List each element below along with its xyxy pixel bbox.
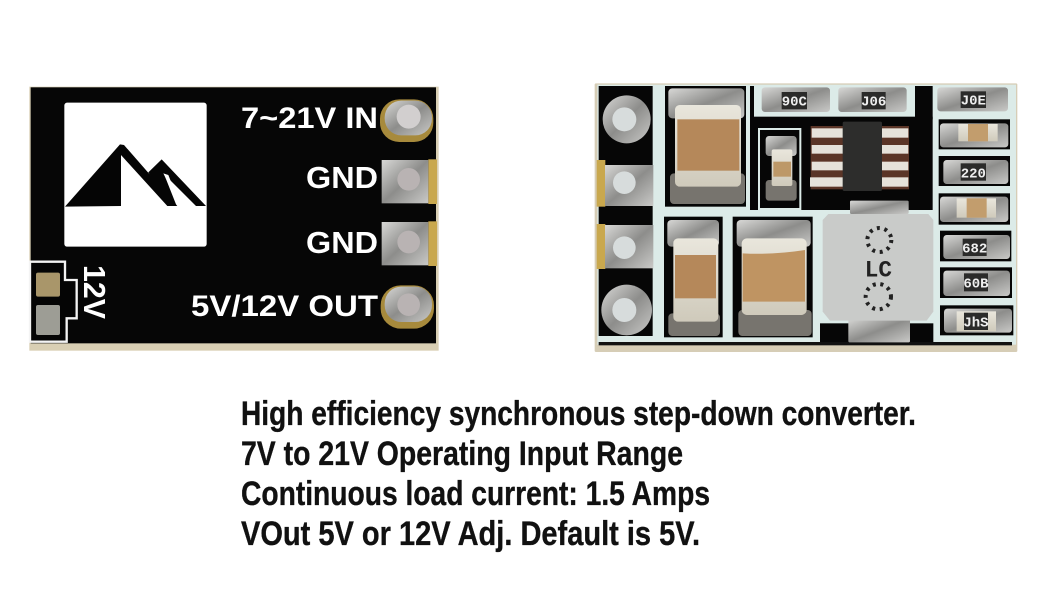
regulator IC with legs	[810, 122, 909, 191]
text block: specifications	[241, 395, 916, 553]
panel: board component side	[595, 83, 1017, 352]
resistor: 90C	[762, 87, 830, 112]
spec line 3: Continuous load current: 1.5 Amps	[241, 475, 710, 513]
resistor: JhS: JhS	[963, 316, 989, 332]
board edge	[29, 87, 439, 351]
label: GND: GND	[306, 160, 378, 195]
spec line 4: VOut 5V or 12V Adj. Default is 5V.	[241, 515, 700, 553]
capacitor: right column top	[940, 123, 1008, 147]
pad: GND 2	[382, 221, 437, 266]
resistor: 682: 682	[962, 242, 987, 258]
inductor	[823, 201, 933, 342]
resistor: 90C: 90C	[782, 94, 807, 110]
resistor: J0E	[937, 87, 1008, 111]
central black area	[750, 117, 933, 210]
label: 7~21V IN: 7~21V IN	[241, 102, 378, 135]
capacitor: right column middle	[940, 197, 1008, 222]
resistor: 220	[943, 160, 1008, 184]
spec line 1: High efficiency synchronous step-down converter.	[241, 395, 916, 433]
jumper: 12V solder bridge	[30, 262, 77, 342]
black solder mask	[31, 87, 436, 343]
pad: input	[380, 99, 433, 142]
resistor: J06: J06	[861, 94, 886, 110]
pad: output	[381, 285, 434, 329]
capacitor: lower left	[664, 217, 723, 337]
resistor: 220: 220	[961, 166, 986, 182]
resistor: J0E: J0E	[961, 93, 986, 109]
black right column rows	[939, 119, 1010, 149]
label: 5V/12V OUT: 5V/12V OUT	[191, 290, 378, 323]
spec line 2: 7V to 21V Operating Input Range	[241, 435, 683, 473]
inductor: LC	[865, 258, 892, 284]
capacitor: small	[759, 129, 800, 209]
resistor: 60B	[943, 271, 1010, 296]
label: GND: GND	[306, 225, 378, 260]
capacitor: lower middle	[733, 217, 813, 337]
resistor: 682	[943, 235, 1010, 259]
black left column	[599, 86, 653, 336]
resistor: JhS	[944, 309, 1012, 333]
pad: GND 1	[382, 159, 437, 204]
pads: through-holes	[597, 95, 653, 335]
capacitor: large top	[665, 86, 746, 207]
panel: board back side	[29, 87, 439, 351]
board base	[595, 83, 1017, 352]
logo: white square with mountains	[64, 103, 207, 247]
resistor: 60B: 60B	[963, 276, 989, 292]
resistor: J06	[838, 87, 907, 112]
label: 12V rotated: 12V	[77, 265, 112, 319]
